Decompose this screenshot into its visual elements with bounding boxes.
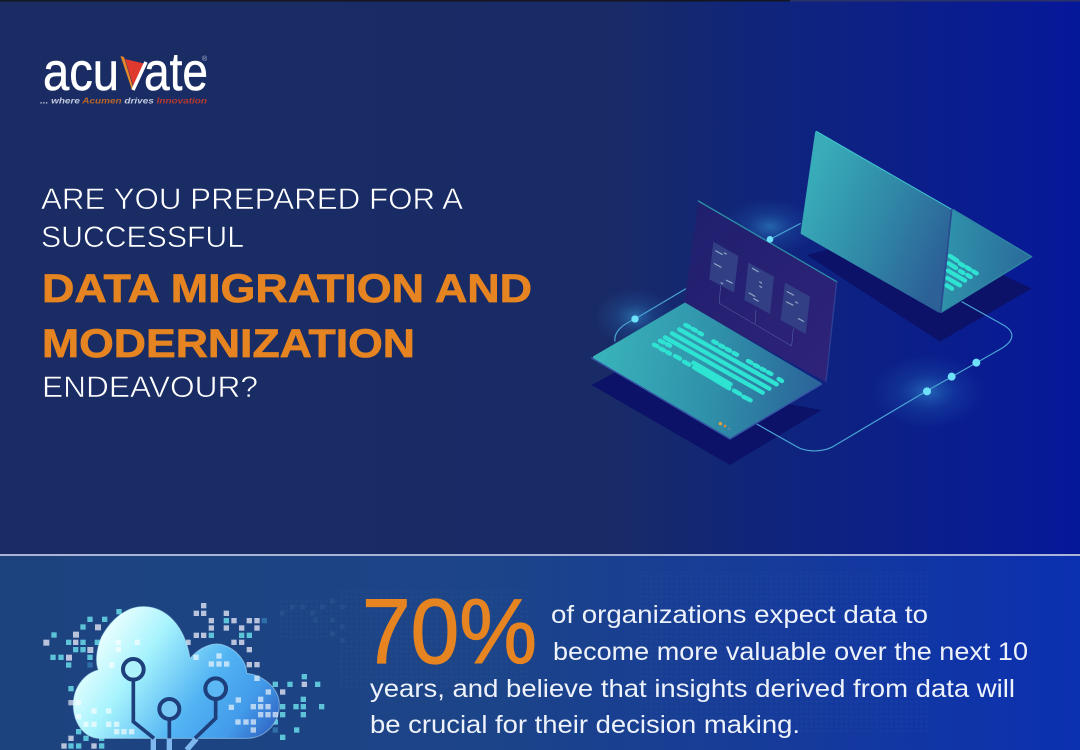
- front laptop screen: [685, 202, 836, 381]
- heading line: are you prepared: ARE YOU PREPARED FOR A: [41, 183, 463, 216]
- circuit traces: [123, 659, 226, 750]
- heading highlight: data migration and: DATA MIGRATION AND: [42, 267, 532, 311]
- logo wordmark: acu: [43, 42, 119, 102]
- cloud shape: [73, 607, 279, 738]
- base front edge: [592, 358, 822, 439]
- description line 4: be crucial for their decision making.: [370, 711, 800, 739]
- logo wordmark end: ate: [144, 42, 208, 102]
- dashboard wires: [719, 283, 793, 346]
- base outer edge: [941, 209, 1032, 313]
- background pixels: [50, 609, 324, 749]
- back laptop base: [942, 211, 1029, 311]
- heading line: endeavour: ENDEAVOUR?: [42, 371, 258, 404]
- back keyboard: [947, 256, 977, 289]
- screen top edge: [698, 201, 837, 282]
- registered mark: ®: [202, 55, 208, 63]
- glow spots: [595, 198, 985, 428]
- front laptop: [592, 201, 837, 439]
- screen right edge: [826, 282, 837, 382]
- shadow: front laptop: [592, 372, 822, 465]
- heading line: successful: SUCCESSFUL: [41, 221, 244, 254]
- description line 1: of organizations expect data to: [551, 601, 928, 629]
- lid right edge: [941, 209, 952, 313]
- heading highlight: modernization: MODERNIZATION: [42, 322, 415, 366]
- logo red triangle: [120, 56, 146, 90]
- description line 3: years, and believe that insights derived from data will: [370, 675, 1015, 703]
- dashboard labels: [714, 251, 804, 322]
- divider: [0, 554, 1080, 556]
- dotted texture: [280, 572, 930, 732]
- nodes: [631, 236, 980, 395]
- description line 2: become more valuable over the next 10: [553, 638, 1028, 666]
- dashboard panels: [709, 242, 810, 334]
- logo: acuvate: [40, 42, 208, 106]
- status lights: [719, 422, 730, 430]
- back laptop lid: [803, 133, 950, 311]
- panel: statistic band: [0, 554, 1080, 750]
- illustration: connected laptops: [592, 131, 1032, 465]
- shadow: back laptop: [807, 230, 1032, 342]
- logo tagline: ... where Acumen drives Innovation: [40, 96, 207, 106]
- connector wires: [615, 223, 1012, 451]
- lid top highlight: [816, 131, 952, 209]
- statistic description: [370, 601, 1028, 739]
- icon: cloud with circuit: [43, 599, 345, 750]
- back laptop: [803, 131, 1032, 313]
- heading: [41, 183, 532, 404]
- panel: hero background: [0, 0, 1080, 556]
- statistic: 70%: 70%: [362, 581, 537, 683]
- foreground pixels: [68, 640, 278, 734]
- keyboard: [654, 325, 782, 400]
- front laptop base: [594, 304, 820, 437]
